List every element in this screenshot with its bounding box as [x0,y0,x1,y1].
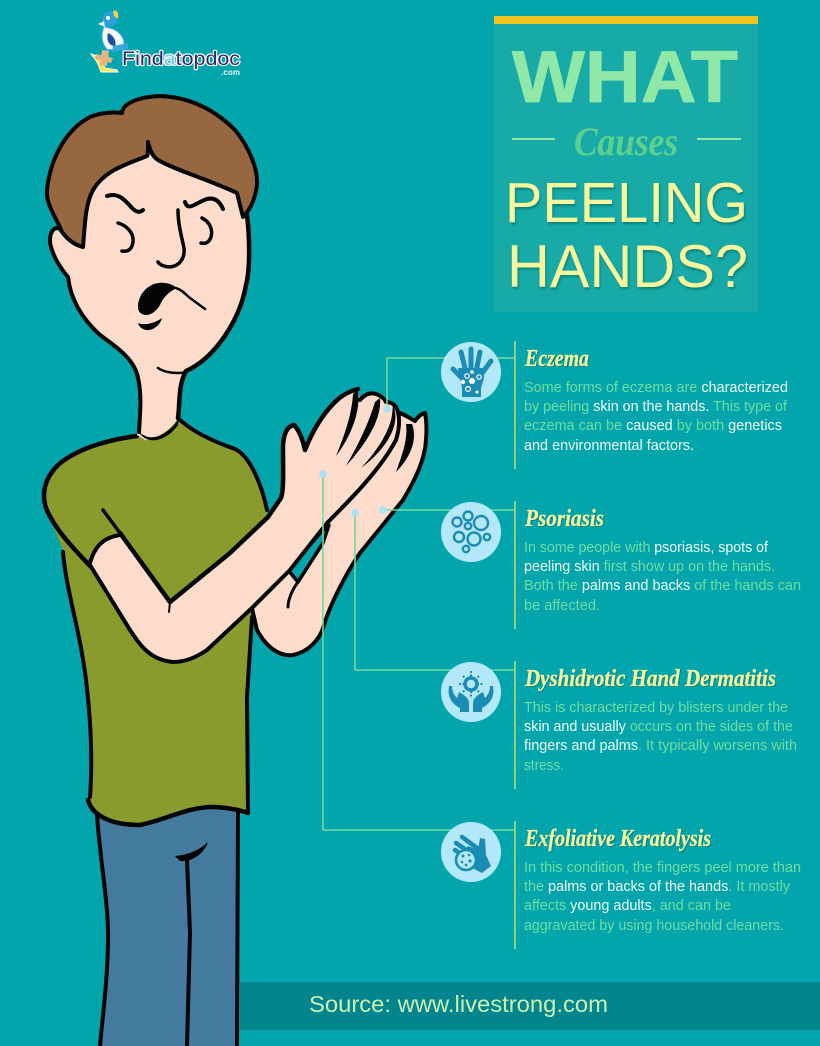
face features [107,195,223,373]
body text: and environmental factors. [524,438,694,454]
logo: Findatopdoc: .com [221,68,240,77]
back arm and hand [250,413,426,655]
body text: by peeling skin on the hands. This type of [524,399,788,415]
panel: eczema [441,341,788,469]
body text: In this condition, the fingers peel more than [524,860,801,876]
hair [47,96,257,247]
title: WHAT: WHAT [512,37,738,118]
connector: exfoliative keratolysis [319,470,515,830]
body text: stress. [524,758,564,774]
heading: Exfoliative Keratolysis [524,826,711,852]
body text: This is characterized by blisters under the [524,700,788,716]
title panel [494,16,758,312]
connector: dyshidrotic hand dermatitis [351,509,515,670]
body text: Both the palms and backs of the hands can [524,578,801,594]
title: PEELING: PEELING [505,171,748,235]
title: HANDS?: HANDS? [507,233,748,300]
icon: duck mascot [91,10,128,72]
icon: rings [441,502,501,562]
jeans [97,806,238,1046]
body text: skin and usually occurs on the sides of the [524,719,793,735]
panel: dyshidrotic hand dermatitis [441,661,797,789]
body text [524,700,797,774]
body text [524,860,801,934]
panel: exfoliative keratolysis [441,821,801,949]
heading: Dyshidrotic Hand Dermatitis [524,666,776,692]
illustration: frustrated man [44,96,426,1046]
icon: hand with spots [441,342,501,402]
body text: Some forms of eczema are characterized [524,380,788,396]
heading: Psoriasis [524,506,604,532]
title: Causes: Causes [574,119,678,164]
panel: psoriasis [441,501,801,629]
body text: In some people with psoriasis, spots of [524,540,769,556]
body text [524,380,788,454]
body text: the palms or backs of the hands. It mostly [524,879,791,895]
logo: Findatopdoc: Findatopdoc [122,49,240,70]
body text: eczema can be caused by both genetics [524,418,782,434]
connector: eczema [383,358,515,413]
body text [524,540,801,614]
logo: Findatopdoc [91,10,240,77]
heading: Eczema [524,346,589,372]
t-shirt [44,418,267,825]
source bar: Source: www.livestrong.com [309,991,608,1017]
icon: hand with magnified skin [441,822,501,882]
head [47,96,257,440]
body text: peeling skin first show up on the hands. [524,559,775,575]
body text: fingers and palms. It typically worsens with [524,738,797,754]
body text: affects young adults, and can be [524,898,731,914]
front arm and hand [90,389,399,662]
body text: be affected. [524,598,600,614]
icon: cupped hands with germ [441,662,501,722]
source bar [240,982,820,1030]
body text: aggravated by using household cleaners. [524,918,784,934]
connector: psoriasis [379,506,515,514]
